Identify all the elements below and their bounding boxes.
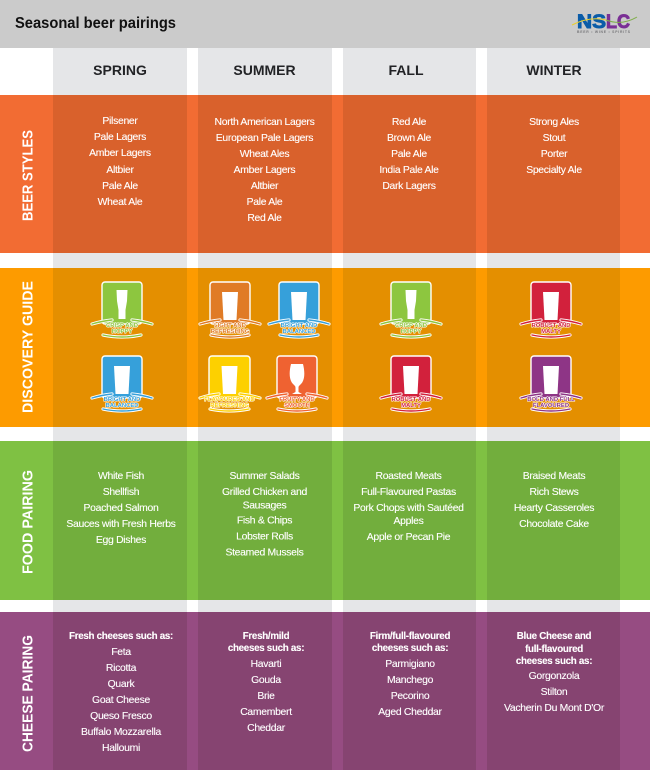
spring food: Sauces with Fresh Herbs bbox=[66, 519, 176, 530]
badge: crisp and hoppy (spring) bbox=[92, 282, 152, 337]
season headings: SPRING bbox=[93, 62, 147, 78]
winter cheese: Blue Cheese and bbox=[517, 631, 592, 642]
fall beer styles: India Pale Ale bbox=[379, 165, 439, 176]
winter cheese: Gorgonzola bbox=[529, 671, 580, 682]
panel: cheese pairing bbox=[0, 612, 650, 770]
spring food: Shellfish bbox=[103, 487, 140, 498]
badge: bright and balanced (summer): BALANCED bbox=[282, 329, 316, 335]
season headings: SUMMER bbox=[233, 62, 296, 78]
fall cheese: Parmigiano bbox=[385, 659, 435, 670]
logo: NSLC: LC bbox=[606, 12, 630, 33]
winter cheese: Stilton bbox=[541, 687, 568, 698]
winter beer styles bbox=[526, 117, 582, 176]
season headings bbox=[93, 62, 582, 78]
row label: cheese pairing: CHEESE PAIRING bbox=[20, 635, 36, 752]
badge: bold and full flavoured (winter): BOLD AND FULL bbox=[527, 397, 575, 403]
summer food: Sausages bbox=[243, 500, 287, 512]
summer beer styles: Red Ale bbox=[247, 213, 282, 224]
winter food: Hearty Casseroles bbox=[514, 503, 594, 514]
spring food: White Fish bbox=[98, 471, 145, 482]
badge: crisp and hoppy (fall): CRISP AND bbox=[395, 323, 427, 329]
badge: bright and balanced (summer) bbox=[269, 282, 329, 337]
season headings: FALL bbox=[388, 62, 424, 78]
season headings: WINTER bbox=[526, 62, 582, 78]
panel: food pairing bbox=[0, 441, 650, 600]
badge: fruity and smooth (summer): SMOOTH bbox=[284, 403, 310, 409]
badge: crisp and hoppy (spring): HOPPY bbox=[112, 329, 132, 335]
spring cheese: Quark bbox=[108, 679, 136, 690]
spring beer styles bbox=[89, 116, 151, 208]
spring cheese: Ricotta bbox=[106, 663, 137, 674]
summer food: Lobster Rolls bbox=[236, 532, 293, 542]
winter cheese bbox=[504, 631, 605, 714]
summer cheese: Gouda bbox=[251, 675, 281, 686]
fall food: Apple or Pecan Pie bbox=[367, 532, 451, 543]
logo: NSLC: NS bbox=[577, 12, 606, 33]
winter beer styles: Specialty Ale bbox=[526, 165, 582, 176]
fall cheese: Manchego bbox=[387, 675, 434, 686]
summer cheese: Havarti bbox=[251, 659, 281, 670]
summer cheese: Camembert bbox=[240, 707, 292, 718]
badge: robust and malty (winter) bbox=[521, 282, 581, 337]
spring beer styles: Pale Ale bbox=[102, 181, 138, 192]
winter food: Rich Stews bbox=[530, 487, 579, 498]
fall beer styles: Pale Ale bbox=[391, 149, 427, 160]
spring cheese: Halloumi bbox=[102, 743, 140, 754]
header bar bbox=[0, 0, 650, 48]
badge: robust and malty (winter): MALTY bbox=[541, 329, 561, 335]
spring cheese: Queso Fresco bbox=[90, 711, 152, 722]
badge: robust and malty (fall): ROBUST AND bbox=[391, 397, 431, 403]
summer food bbox=[222, 471, 308, 558]
summer food: Fish & Chips bbox=[237, 516, 292, 526]
badge: light and refreshing (summer): REFRESHING bbox=[211, 329, 250, 335]
winter food: Chocolate Cake bbox=[519, 519, 589, 530]
spring cheese: Feta bbox=[111, 647, 131, 658]
summer beer styles: European Pale Lagers bbox=[216, 133, 313, 144]
fall cheese: cheeses such as: bbox=[372, 643, 448, 654]
spring beer styles: Wheat Ale bbox=[98, 197, 143, 208]
spring beer styles: Altbier bbox=[106, 165, 135, 176]
panel: beer styles bbox=[0, 95, 650, 253]
spring cheese: Fresh cheeses such as: bbox=[69, 631, 173, 642]
badge: robust and malty (fall): MALTY bbox=[401, 403, 421, 409]
spring beer styles: Amber Lagers bbox=[89, 148, 151, 159]
winter beer styles: Stout bbox=[543, 133, 566, 144]
badge: light and refreshing (summer) bbox=[200, 282, 260, 337]
winter cheese: cheeses such as: bbox=[516, 656, 592, 667]
winter cheese: full-flavoured bbox=[525, 644, 583, 655]
fall beer styles bbox=[379, 117, 439, 192]
spring cheese: Buffalo Mozzarella bbox=[81, 727, 161, 738]
winter beer styles: Strong Ales bbox=[529, 117, 579, 128]
badge: crisp and hoppy (spring): CRISP AND bbox=[106, 323, 138, 329]
fall beer styles: Red Ale bbox=[392, 117, 427, 128]
spring cheese bbox=[69, 631, 173, 754]
spring beer styles: Pale Lagers bbox=[94, 132, 146, 143]
spring food: Poached Salmon bbox=[84, 503, 159, 514]
winter food bbox=[514, 471, 594, 530]
badge: crisp and hoppy (fall): HOPPY bbox=[401, 329, 421, 335]
badge: flavoured and refreshing (summer) bbox=[200, 356, 260, 411]
row label: discovery guide: DISCOVERY GUIDE bbox=[20, 281, 36, 413]
row label: food pairing: FOOD PAIRING bbox=[20, 470, 36, 574]
summer cheese: cheeses such as: bbox=[228, 643, 304, 654]
badge: flavoured and refreshing (summer): FLAVOURED AND bbox=[204, 397, 255, 403]
badge: flavoured and refreshing (summer): REFRESHING bbox=[210, 403, 249, 409]
badge: bold and full flavoured (winter) bbox=[521, 356, 581, 411]
badge: bright and balanced (summer): BRIGHT AND bbox=[281, 323, 317, 329]
fall cheese: Aged Cheddar bbox=[378, 707, 443, 718]
summer beer styles: Amber Lagers bbox=[234, 165, 295, 176]
badge: robust and malty (fall) bbox=[381, 356, 441, 411]
spring food bbox=[66, 471, 176, 546]
badge: robust and malty (winter): ROBUST AND bbox=[531, 323, 571, 329]
badge: bold and full flavoured (winter): FLAVOURED bbox=[533, 403, 569, 409]
fall beer styles: Brown Ale bbox=[387, 133, 432, 144]
summer cheese: Brie bbox=[257, 691, 275, 702]
logo: NSLC bbox=[572, 12, 637, 34]
summer cheese: Fresh/mild bbox=[243, 631, 290, 642]
badge: bright and balanced (spring): BRIGHT AND bbox=[104, 397, 140, 403]
row label: beer styles: BEER STYLES bbox=[20, 130, 36, 221]
winter food: Braised Meats bbox=[523, 471, 585, 482]
fall food: Roasted Meats bbox=[376, 471, 442, 482]
spring beer styles: Pilsener bbox=[102, 116, 138, 127]
summer cheese: Cheddar bbox=[247, 723, 286, 734]
summer beer styles: Altbier bbox=[251, 181, 279, 192]
summer food: Grilled Chicken and bbox=[222, 487, 308, 498]
winter beer styles: Porter bbox=[541, 149, 568, 160]
summer food: Steamed Mussels bbox=[225, 548, 304, 558]
summer food: Summer Salads bbox=[229, 471, 300, 482]
fall food: Pork Chops with Sautéed bbox=[353, 503, 464, 514]
summer cheese bbox=[228, 631, 304, 734]
badge: fruity and smooth (summer) bbox=[267, 356, 327, 411]
badge: fruity and smooth (summer): FRUITY AND bbox=[279, 397, 315, 403]
fall food bbox=[353, 471, 464, 543]
fall cheese bbox=[370, 631, 450, 718]
summer beer styles: Wheat Ales bbox=[240, 149, 289, 160]
summer beer styles: North American Lagers bbox=[215, 117, 315, 128]
badge: bright and balanced (spring) bbox=[92, 356, 152, 411]
title: Seasonal beer pairings bbox=[15, 15, 176, 32]
panel: discovery guide bbox=[0, 268, 650, 427]
spring food: Egg Dishes bbox=[96, 535, 146, 546]
badge: bright and balanced (spring): BALANCED bbox=[105, 403, 139, 409]
fall cheese: Pecorino bbox=[391, 691, 430, 702]
fall food: Apples bbox=[394, 516, 424, 527]
summer beer styles: Pale Ale bbox=[247, 197, 283, 208]
spring cheese: Goat Cheese bbox=[92, 695, 150, 706]
fall food: Full-Flavoured Pastas bbox=[361, 487, 456, 498]
badge: light and refreshing (summer): LIGHT AND bbox=[214, 323, 246, 329]
summer beer styles bbox=[215, 117, 315, 224]
fall beer styles: Dark Lagers bbox=[382, 181, 436, 192]
logo: NSLC: BEER • WINE • SPIRITS bbox=[577, 30, 631, 34]
fall cheese: Firm/full-flavoured bbox=[370, 631, 450, 642]
badge: crisp and hoppy (fall) bbox=[381, 282, 441, 337]
winter cheese: Vacherin Du Mont D'Or bbox=[504, 703, 605, 714]
